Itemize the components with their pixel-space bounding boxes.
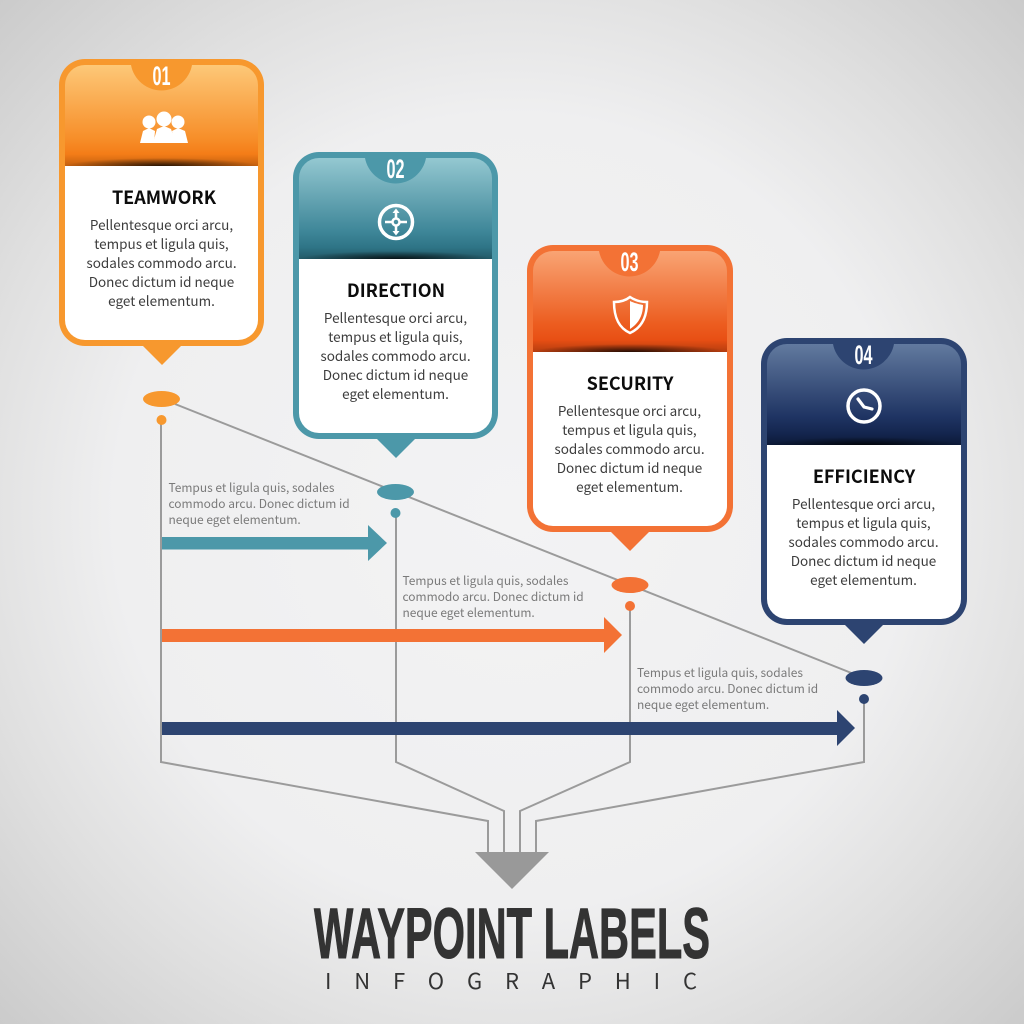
body text: Pellentesque orci arcu, [90,214,233,234]
header shadow [65,150,258,166]
number tab [131,65,192,90]
number tab [365,158,426,183]
white body [533,352,727,526]
icon: shield [614,297,647,333]
gradient header [767,344,961,445]
card 2: direction [293,152,498,458]
note 3: commodo arcu. Donec dictum id [637,680,818,697]
arrow: teal [162,525,387,561]
body text: tempus et ligula quis, [328,326,463,346]
number: 01 [152,61,170,91]
icon: team [140,112,188,143]
header shadow [533,336,727,352]
body text: sodales commodo arcu. [86,252,237,272]
waypoint 3 [612,577,648,611]
waypoint 4 [846,670,882,704]
body text: eget elementum. [342,383,449,403]
waypoint 2 [377,484,414,518]
card frame [761,338,967,644]
icon: clock [848,390,880,422]
note 1: neque eget elementum. [168,511,301,528]
number: 02 [386,154,404,184]
gradient header [299,158,492,259]
white body [299,259,492,433]
white body [65,166,258,340]
heading: TEAMWORK [112,184,217,210]
body text: tempus et ligula quis, [562,419,697,439]
number tab [833,344,894,369]
body text: eget elementum. [108,290,215,310]
header shadow [767,429,961,445]
number: 03 [620,247,638,277]
arrow: navy [162,710,855,746]
body text: eget elementum. [576,476,683,496]
heading: SECURITY [587,370,674,396]
number: 04 [854,340,872,370]
number tab [599,251,660,276]
gradient header [65,65,258,166]
heading: DIRECTION [347,277,445,303]
body text: tempus et ligula quis, [796,512,931,532]
card 4: efficiency [761,338,967,644]
note 1: Tempus et ligula quis, sodales [168,479,335,496]
note 2: commodo arcu. Donec dictum id [402,588,584,605]
body text: Pellentesque orci arcu, [792,493,935,513]
icon: compass [380,206,412,238]
card 1: teamwork [59,59,264,365]
note 3: neque eget elementum. [637,696,769,713]
note 3: Tempus et ligula quis, sodales [637,664,803,681]
body text: Donec dictum id neque [323,364,468,384]
body text: Donec dictum id neque [89,271,234,291]
subtitle: INFOGRAPHIC [325,964,697,996]
note 2: neque eget elementum. [402,604,535,621]
body text: eget elementum. [810,569,917,589]
body text: tempus et ligula quis, [94,233,229,253]
card frame [59,59,264,365]
heading: EFFICIENCY [813,463,916,489]
arrow: orange [162,617,622,653]
gradient header [533,251,727,352]
body text: Pellentesque orci arcu, [324,307,467,327]
waypoint 1 [143,391,180,425]
header shadow [299,243,492,259]
body text: Donec dictum id neque [791,550,936,570]
card frame [527,245,733,551]
body text: sodales commodo arcu. [554,438,705,458]
body text: Pellentesque orci arcu, [558,400,701,420]
white body [767,445,961,619]
connector lines [161,404,864,853]
note 2: Tempus et ligula quis, sodales [402,572,569,589]
body text: Donec dictum id neque [557,457,702,477]
card 3: security [527,245,733,551]
card frame [293,152,498,458]
body text: sodales commodo arcu. [788,531,939,551]
body text: sodales commodo arcu. [320,345,471,365]
note 1: commodo arcu. Donec dictum id [168,495,350,512]
title: WAYPOINT LABELS [314,895,710,974]
funnel arrowhead [475,852,549,889]
